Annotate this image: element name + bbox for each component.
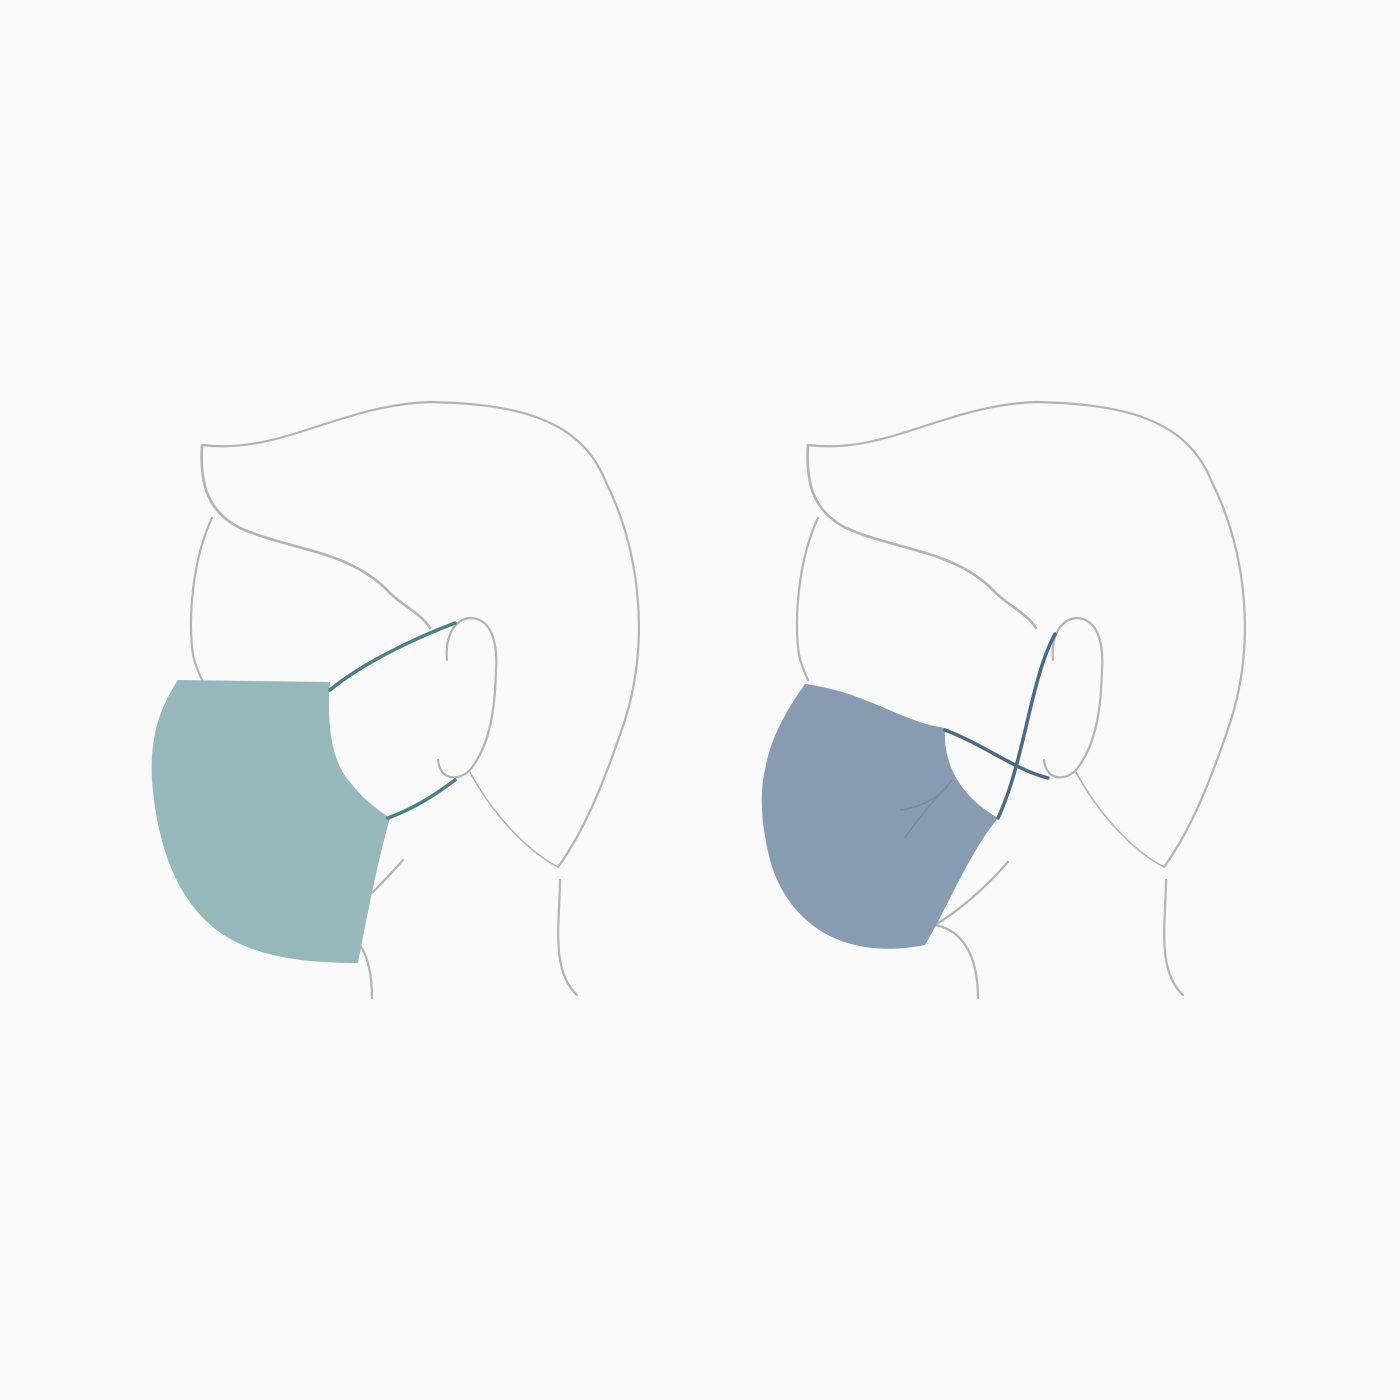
mask folds: [900, 780, 952, 838]
figure: right head with blue mask: [762, 402, 1245, 998]
straps: teal: [330, 623, 455, 818]
straps: slate blue: [945, 634, 1055, 818]
mask: slate blue: [762, 684, 998, 949]
figure: left head with teal mask: [152, 402, 639, 998]
mask: teal: [152, 680, 390, 963]
